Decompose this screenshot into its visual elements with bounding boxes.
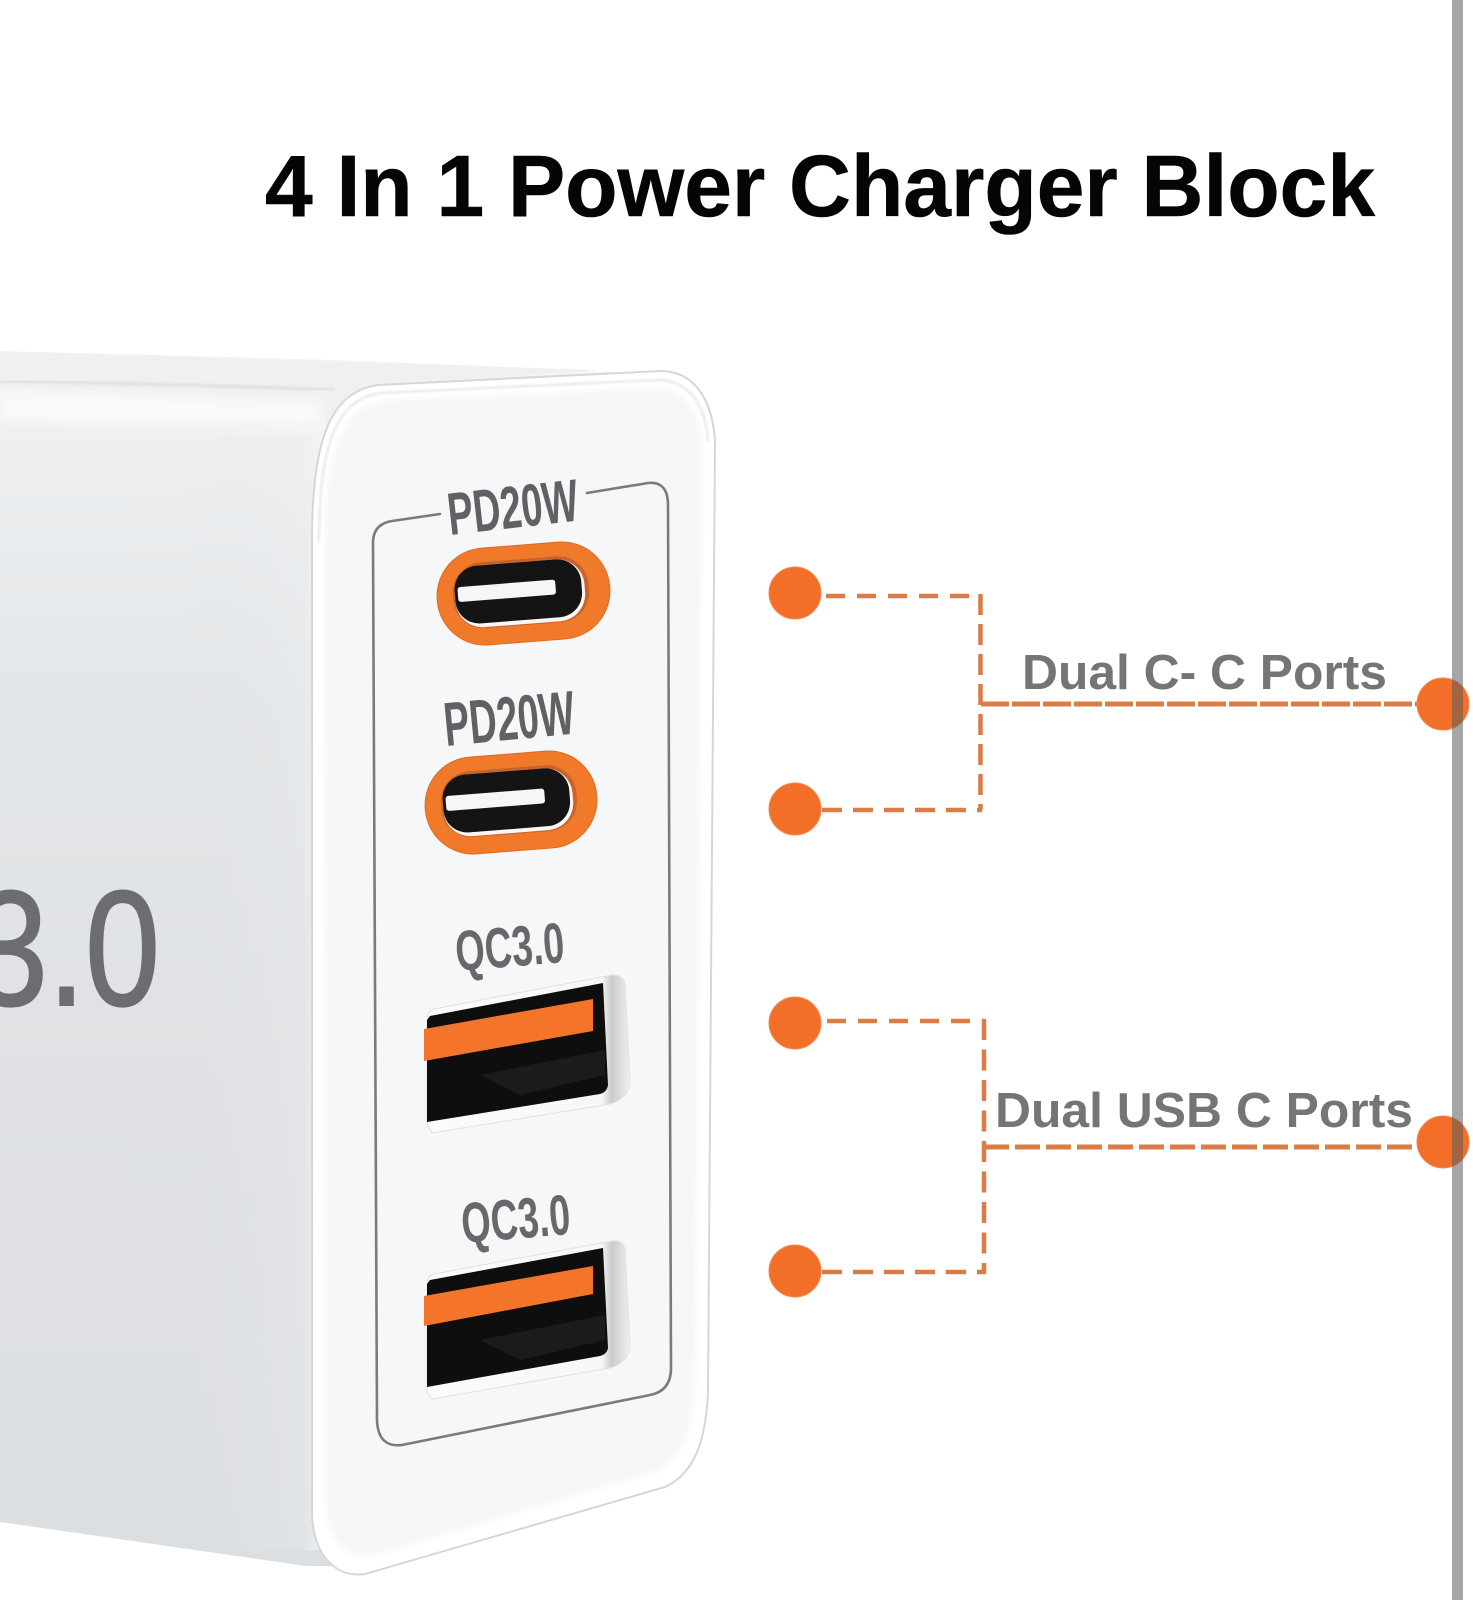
callout: Dual C- C Ports [769, 567, 1420, 835]
USB-A port lower [424, 1241, 630, 1399]
label: QC3.0 upper: QC3.0 [453, 911, 567, 984]
right endpoint dot: Dual USB C Ports [1417, 1116, 1469, 1168]
USB-C port lower [421, 747, 601, 858]
connector lines [822, 594, 1420, 810]
label: QC3.0 lower: QC3.0 [459, 1183, 573, 1256]
USB-A port upper [424, 975, 630, 1133]
port group outline [373, 483, 671, 1445]
callout label: Dual USB C Ports [995, 1084, 1413, 1138]
title: 4 In 1 Power Charger Block [265, 138, 1376, 235]
port dot upper [769, 997, 821, 1049]
callout label: Dual C- C Ports [1022, 646, 1387, 700]
right endpoint dot: Dual C- C Ports [1417, 678, 1469, 730]
charger illustration [0, 351, 715, 1574]
port dot lower [769, 783, 821, 835]
charger side body [0, 351, 677, 1566]
port dot lower [769, 1245, 821, 1297]
label: PD20W lower: PD20W [441, 679, 578, 760]
port dot upper [769, 567, 821, 619]
label: PD20W upper: PD20W [444, 467, 582, 548]
connector lines [822, 1019, 1420, 1274]
vertical divider bar [1452, 0, 1463, 1600]
charger front face [312, 371, 715, 1574]
callout: Dual USB C Ports [769, 997, 1420, 1297]
USB-C port upper [433, 538, 614, 649]
